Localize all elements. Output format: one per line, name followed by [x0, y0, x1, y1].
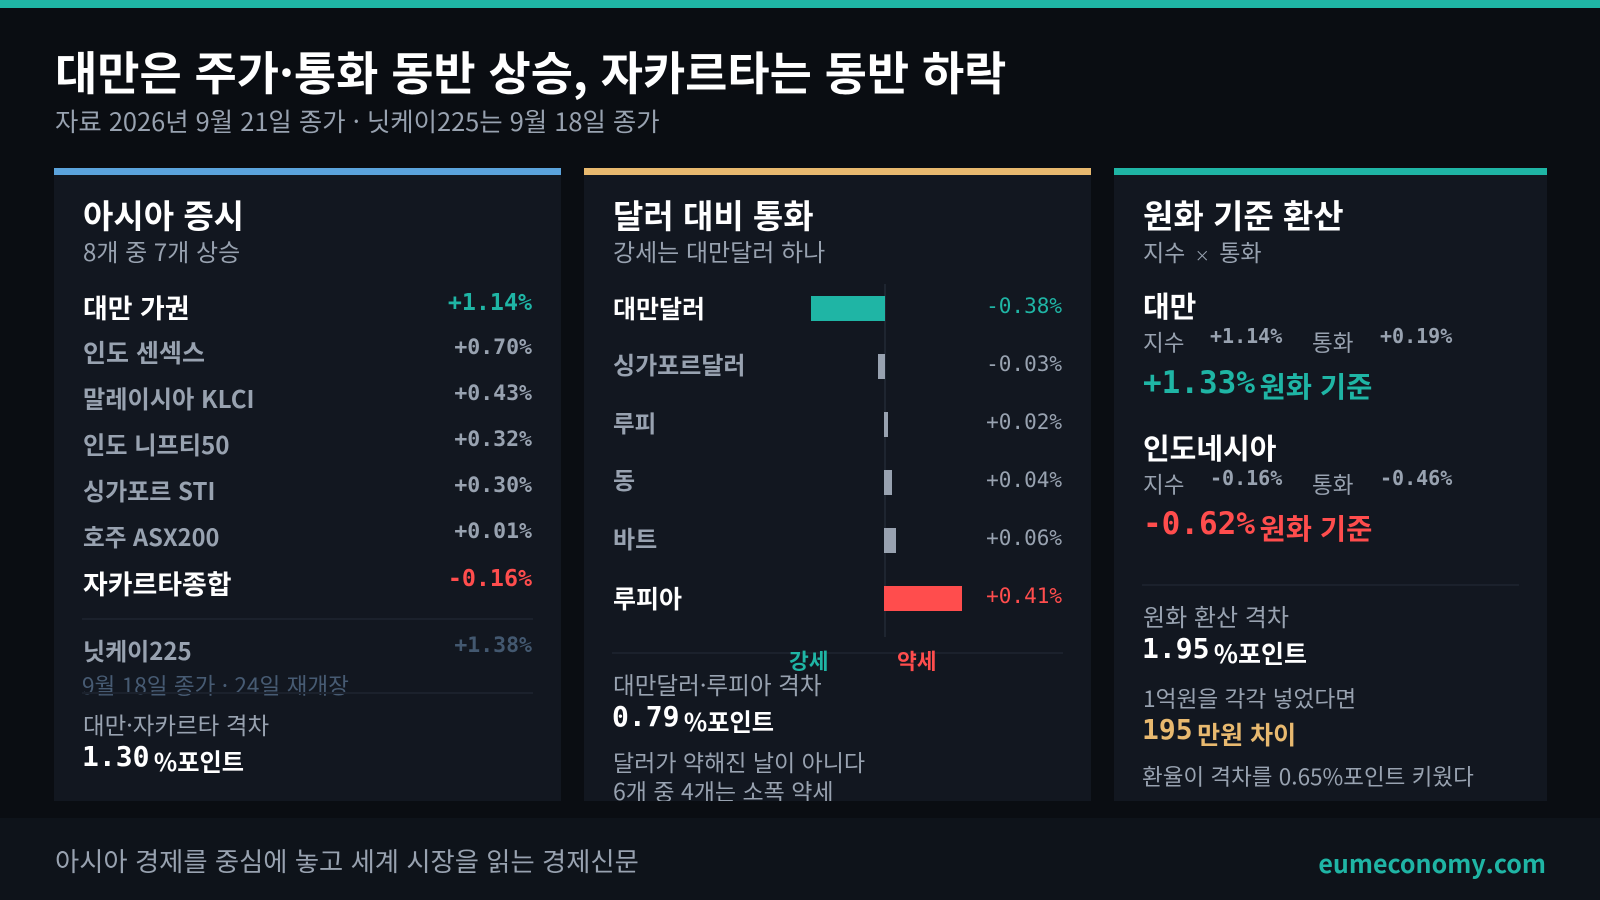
- row value: australia: +0.01%: [454, 519, 532, 544]
- value: SGD: -0.03%: [986, 352, 1062, 376]
- value: TWD: -0.38%: [986, 294, 1062, 318]
- value: rupee: +0.02%: [986, 410, 1062, 434]
- indonesia index label: 지수: [1143, 468, 1184, 500]
- row label: singapore: 싱가포르 STI: [83, 472, 215, 507]
- axis line: [884, 284, 886, 637]
- footer tagline: 아시아 경제를 중심에 놓고 세계 시장을 읽는 경제신문: [55, 840, 639, 879]
- panel accent: [54, 168, 561, 175]
- indonesia result: -0.62% 원화 기준: [1143, 506, 1372, 548]
- label: rupiah: 루피아: [613, 580, 682, 616]
- value: rupiah: +0.41%: [986, 584, 1062, 608]
- bar: dong: [884, 470, 892, 495]
- panel subheading: 8개 중 7개 상승: [83, 233, 240, 268]
- taiwan currency label: 통화: [1312, 326, 1353, 358]
- row label: nifty: 인도 니프티50: [83, 426, 230, 461]
- gap value: 0.79 %포인트: [612, 700, 774, 738]
- footer site: eumeconomy.com: [1318, 845, 1546, 881]
- hundred million label: 1억원을 각각 넣었다면: [1143, 681, 1356, 714]
- taiwan index value: +1.14%: [1210, 324, 1282, 348]
- label: SGD: 싱가포르달러: [613, 346, 745, 381]
- indonesia index value: -0.16%: [1210, 466, 1282, 490]
- indonesia currency label: 통화: [1312, 468, 1353, 500]
- gap value: 1.30 %포인트: [82, 740, 244, 778]
- axis label weak: 약세: [897, 645, 937, 676]
- value: dong: +0.04%: [986, 468, 1062, 492]
- panel accent: [584, 168, 1091, 175]
- won difference: 195 만원 차이: [1142, 713, 1296, 752]
- row label: taiwan: 대만 가권: [83, 287, 190, 326]
- panel heading: 달러 대비 통화: [613, 190, 814, 238]
- taiwan result: +1.33% 원화 기준: [1143, 365, 1372, 406]
- note: 달러가 약해진 날이 아니다: [613, 744, 865, 778]
- row value: jakarta: -0.16%: [448, 565, 532, 592]
- indonesia heading: 인도네시아: [1143, 426, 1276, 468]
- row value: singapore: +0.30%: [454, 473, 532, 498]
- label: rupee: 루피: [613, 405, 656, 439]
- nikkei note: 9월 18일 종가 · 24일 재개장: [82, 668, 349, 701]
- note: 환율이 격차를 0.65%포인트 키웠다: [1142, 760, 1474, 792]
- label: dong: 동: [613, 461, 635, 496]
- indonesia currency value: -0.46%: [1380, 466, 1452, 490]
- panel: currencies vs dollar: [584, 168, 1091, 801]
- bar: SGD: [878, 354, 885, 379]
- row label: india sensex: 인도 센섹스: [83, 334, 205, 370]
- taiwan index label: 지수: [1143, 326, 1184, 358]
- row value: malaysia: +0.43%: [454, 381, 532, 406]
- panel subheading: 지수 × 통화: [1143, 234, 1262, 268]
- taiwan heading: 대만: [1143, 284, 1196, 326]
- note: [613, 744, 865, 801]
- row label: australia: 호주 ASX200: [83, 519, 219, 553]
- gap value: 1.95 %포인트: [1142, 632, 1307, 671]
- bar: baht: [884, 528, 896, 553]
- subtitle: 자료 2026년 9월 21일 종가 · 닛케이225는 9월 18일 종가: [55, 103, 660, 139]
- panel heading: 원화 기준 환산: [1143, 190, 1344, 238]
- bar: rupee: [884, 412, 888, 437]
- gap label: 원화 환산 격차: [1143, 598, 1289, 633]
- gap label: 대만달러·루피아 격차: [613, 667, 822, 701]
- row value: nifty: +0.32%: [454, 427, 532, 452]
- label: baht: 바트: [613, 520, 657, 555]
- label: TWD: 대만달러: [613, 290, 705, 326]
- gap label: 대만·자카르타 격차: [83, 707, 269, 741]
- bar: rupiah: [884, 586, 962, 611]
- panel subheading: 강세는 대만달러 하나: [613, 233, 825, 268]
- taiwan currency value: +0.19%: [1380, 324, 1452, 348]
- panel: won-based conversion: [1114, 168, 1547, 801]
- row value: taiwan: +1.14%: [448, 289, 532, 316]
- row value: india sensex: +0.70%: [454, 335, 532, 360]
- row value: nikkei: +1.38%: [454, 633, 532, 658]
- row label: nikkei: 닛케이225: [83, 632, 192, 667]
- panel heading: 아시아 증시: [83, 190, 244, 238]
- axis label strong: 강세: [789, 645, 829, 676]
- panel accent: [1114, 168, 1547, 175]
- bar: TWD: [811, 296, 885, 321]
- panel: asian stocks: [54, 168, 561, 801]
- footer: [0, 818, 1600, 900]
- row label: malaysia: 말레이시아 KLCI: [83, 380, 255, 415]
- title: 대만은 주가·통화 동반 상승, 자카르타는 동반 하락: [55, 38, 1006, 104]
- row label: jakarta: 자카르타종합: [83, 563, 231, 602]
- value: baht: +0.06%: [986, 526, 1062, 550]
- top accent bar: [0, 0, 1600, 8]
